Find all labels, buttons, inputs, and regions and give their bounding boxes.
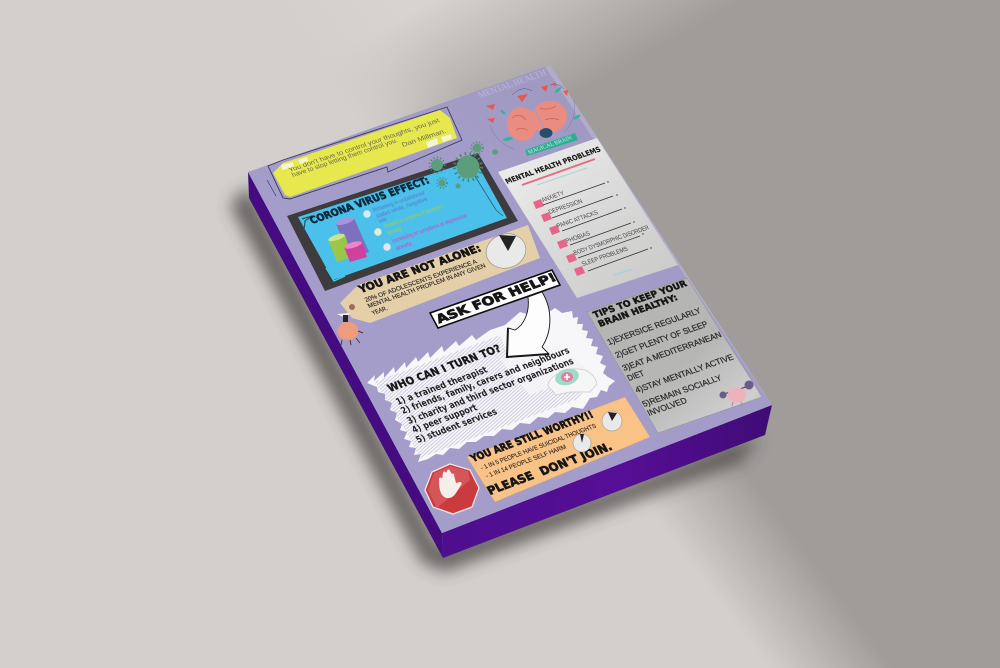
- tips list: 5)REMAIN SOCIALLY: [640, 373, 723, 409]
- item: sleep problems: [574, 246, 652, 276]
- quote text: Dan Millman.: [401, 128, 448, 149]
- item C: [383, 213, 469, 252]
- tips list: 3)EAT A MEDITERRANEAN: [620, 330, 723, 373]
- item C: Increasing of symptoms of depression: [391, 213, 469, 245]
- item: depression: [541, 194, 618, 222]
- item: anxiety: [533, 181, 609, 209]
- pie chart 20 percent: [482, 229, 530, 273]
- tips list: DIET: [625, 368, 646, 383]
- scribble background: who can I turn to: [367, 308, 615, 462]
- statistics: - 1 IN 14 PEOPLE SELF HARM: [484, 444, 568, 480]
- mascot: brain lifting weights: [720, 380, 754, 406]
- item A: Retaining in unbalanced: [372, 191, 426, 214]
- panel: mental health problems: [498, 138, 678, 298]
- list of support: 2) friends, family, carers and neighbours: [399, 346, 572, 417]
- item: phobias: PHOBIAS: [564, 230, 592, 245]
- item B: Impaired in symptoms of depression: [383, 204, 445, 230]
- illustration: brain with hearts: [486, 82, 581, 156]
- book cast shadow: [230, 186, 760, 572]
- item A: order: [378, 217, 389, 225]
- item: panic attacks: [549, 207, 626, 235]
- item A: states while, Negative: [375, 196, 430, 220]
- arrow pointing down: [507, 292, 550, 357]
- quote text: You don't have to control your thoughts, you just: [288, 117, 441, 174]
- statistics: - 1 IN 5 PEOPLE HAVE SUICIDAL THOUGHTS: [479, 423, 598, 472]
- hearts and leaves: [486, 82, 581, 142]
- item: phobias: [557, 221, 635, 249]
- tips list: 2)GET PLENTY OF SLEEP: [613, 319, 710, 360]
- item B: [374, 204, 445, 237]
- icon: stop hand sign: [425, 464, 479, 514]
- brain label: MAGICAL BRAIN: [527, 135, 574, 156]
- page surface: [248, 65, 772, 533]
- item: body dysmorphic disorder: BODY DYSMORPHIC DISORDER: [572, 225, 651, 257]
- pie chart 1 in 5: [602, 411, 622, 431]
- tips list: INVOLVED: [645, 396, 689, 418]
- tag text: YEAR.: [371, 305, 389, 317]
- list of support: 3) charity and third sector organizations: [405, 356, 576, 427]
- quote text: have to stop letting them control you.: [291, 137, 399, 179]
- speech bubble quote: [267, 107, 462, 199]
- list of support: [394, 346, 576, 446]
- heading: MENTAL HEALTH PROBLEMS: [503, 145, 603, 186]
- tag text: MENTAL HEALTH PROPLEM IN ANY GIVEN: [367, 263, 487, 310]
- heading: YOU ARE NOT ALONE:: [355, 242, 483, 296]
- tips list: 1)EXERSICE REGULARLY: [605, 306, 703, 347]
- item: depression: DEPRESSION: [547, 198, 584, 216]
- item A: [363, 191, 430, 225]
- panel: corona virus effect: [287, 142, 518, 291]
- icon: head with medical cross: [548, 366, 597, 395]
- list of support: 1) a trained therapist: [394, 365, 490, 408]
- panel: you are still worthy: [467, 397, 650, 502]
- heading: WHO CAN I TURN TO?: [385, 342, 503, 395]
- panel: you are not alone tag: [340, 225, 540, 323]
- heading: YOU ARE STILL WORTHY!!: [468, 409, 596, 465]
- ask for help banner: ASK FOR HELP!: [433, 270, 559, 326]
- item B: anxiety: [386, 227, 403, 237]
- item C: anxiety: [395, 241, 413, 252]
- list of support: 5) student services: [414, 407, 500, 446]
- book side edges: [248, 172, 772, 558]
- item: panic attacks: PANIC ATTACKS: [555, 209, 600, 230]
- panel: tips to keep your brain healthy: [587, 278, 762, 433]
- item: body dysmorphic disorder: [566, 225, 651, 263]
- quote text: [288, 117, 448, 179]
- heading: CORONA VIRUS EFFECT:: [308, 175, 432, 227]
- tips list: [605, 306, 735, 418]
- item: anxiety: ANXIETY: [540, 190, 566, 204]
- please don't join: PLEASE DON'T JOIN.: [484, 440, 615, 498]
- pie chart 1 in 14: [573, 434, 591, 452]
- tips list: 4)STAY MENTALLY ACTIVE: [633, 352, 735, 395]
- item: sleep problems: SLEEP PROBLEMS: [580, 246, 630, 268]
- 3d cylinder chart: [328, 215, 369, 262]
- heading: TIPS TO KEEP YOUR: [591, 279, 689, 321]
- list of support: 4) peer support: [410, 403, 480, 436]
- virus icons: [430, 142, 498, 188]
- title: mental health: MENTAL HEALTH: [476, 68, 549, 101]
- mascot: brain with hat: [337, 313, 363, 345]
- panel: tips to keep your brain healthy: BRAIN HEALTHY:: [596, 293, 680, 330]
- tag text: 20% OF ADOLESCENTS EXPERIENCE A: [364, 258, 479, 304]
